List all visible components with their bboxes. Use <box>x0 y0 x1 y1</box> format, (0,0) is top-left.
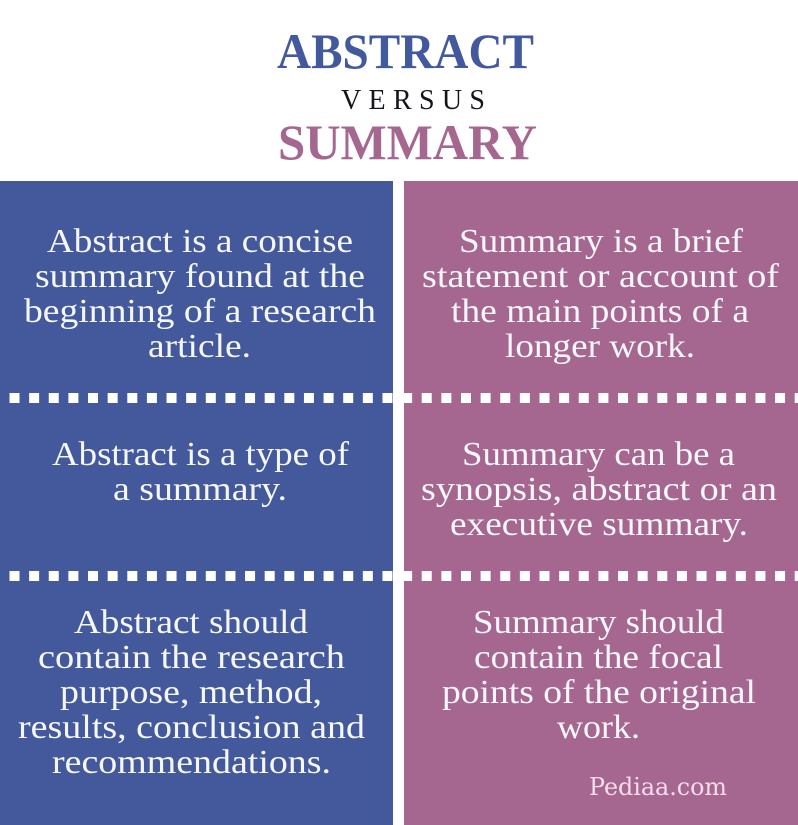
title: summary: SUMMARY <box>278 114 537 170</box>
title: abstract: ABSTRACT <box>277 23 534 79</box>
text block: abstract type: Abstract is a type of <box>52 436 350 473</box>
text block: summary definition <box>422 223 780 365</box>
text block: abstract definition: article. <box>148 328 251 365</box>
text block: summary types <box>421 436 777 543</box>
text block: abstract contents: results, conclusion and <box>18 709 365 746</box>
text block: abstract contents: contain the research <box>38 639 345 676</box>
text block: summary definition: statement or account of <box>422 258 780 295</box>
text block: summary contents <box>442 604 756 746</box>
text block: abstract definition <box>24 223 376 365</box>
text block: abstract type <box>52 436 350 508</box>
text block: summary types: synopsis, abstract or an <box>421 471 777 508</box>
text block: abstract contents: recommendations. <box>52 744 331 781</box>
text block: abstract contents: Abstract should <box>74 604 308 641</box>
text block: summary contents: points of the original <box>442 674 756 711</box>
text block: summary types: Summary can be a <box>462 436 735 473</box>
text block: abstract type: a summary. <box>113 471 287 508</box>
text block: summary definition: Summary is a brief <box>459 223 744 260</box>
text block: abstract contents <box>18 604 365 781</box>
text block: summary definition: the main points of a <box>451 293 749 330</box>
subtitle: versus: VERSUS <box>341 85 485 116</box>
panel: abstract column background <box>0 181 393 825</box>
text block: summary contents: Summary should <box>473 604 724 641</box>
text block: abstract definition: summary found at the <box>35 258 365 295</box>
text block: summary contents: contain the focal <box>474 639 723 676</box>
text block: summary contents: work. <box>557 709 640 746</box>
text block: summary definition: longer work. <box>505 328 695 365</box>
panel: summary column background <box>404 181 798 825</box>
text block: abstract definition: beginning of a research <box>24 293 376 330</box>
brand: Pediaa.com: Pediaa.com <box>589 773 727 801</box>
text block: summary types: executive summary. <box>450 506 748 543</box>
text block: abstract definition: Abstract is a concise <box>47 223 353 260</box>
text block: abstract contents: purpose, method, <box>60 674 322 711</box>
